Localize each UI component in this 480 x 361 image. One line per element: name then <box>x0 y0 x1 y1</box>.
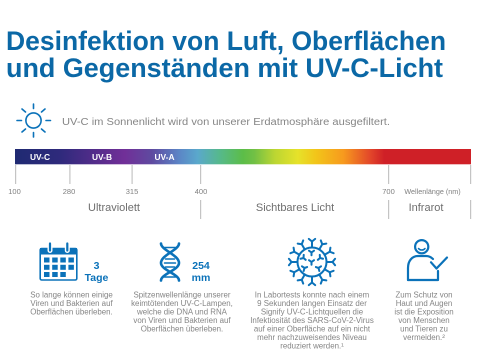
stat: 3 Tage: Tage <box>85 272 109 284</box>
spectrum bar: UV-B <box>92 152 112 162</box>
spectrum bar: UV-C <box>30 152 50 162</box>
wavelength scale <box>8 165 471 219</box>
text: virus description: Signify UV-C-Lichtquellen die <box>261 308 364 316</box>
stat: 3 Tage: 3 <box>94 260 100 272</box>
text: protection description: ist die Exposition <box>394 308 454 316</box>
wavelength scale: Wellenlänge (nm) <box>404 187 461 196</box>
text: 3 days description: So lange können einige <box>30 290 113 300</box>
title <box>6 26 446 83</box>
stat: 254 mm: mm <box>192 272 210 284</box>
text: protection description: Zum Schutz von <box>395 290 453 300</box>
stat: 254 mm: 254 <box>192 260 210 272</box>
text: virus description: mehr nachzuweisendes Niveau <box>257 333 367 342</box>
text: virus description: In Labortests konnte nach einem <box>255 290 370 300</box>
text: 254 description: Oberflächen überleben. <box>141 324 223 334</box>
text: 254 description: Spitzenwellenlänge unserer <box>134 290 231 300</box>
title: und Gegenständen mit UV-C-Licht <box>6 53 443 83</box>
text: protection description <box>394 290 454 342</box>
text: protection description: von Menschen <box>398 316 450 325</box>
text: protection description: Haut und Augen <box>396 299 452 308</box>
spectrum region labels: Ultraviolett <box>88 202 140 214</box>
text: 254 description: keimtötenden UV-C-Lampen, <box>131 299 233 308</box>
intro text: UV-C im Sonnenlicht wird von unserer Erdatmosphäre ausgefiltert. <box>62 117 390 128</box>
text: virus description: reduziert werden.¹ <box>280 342 344 350</box>
text: virus description: auf einer Oberfläche auf ein nicht <box>254 324 371 334</box>
icon: DNA helix <box>161 244 179 280</box>
text: virus description: 9 Sekunden langen Einsatz der <box>257 299 367 308</box>
stat: 254 mm <box>192 260 210 284</box>
spectrum region labels: Infrarot <box>409 202 443 214</box>
text: virus description <box>250 290 374 350</box>
spectrum region labels <box>88 202 443 214</box>
text: protection description: und Tieren zu <box>400 324 448 334</box>
wavelength scale: 700 <box>382 187 395 196</box>
icon: person with check mark <box>408 240 447 280</box>
wavelength scale: 100 <box>8 187 21 196</box>
spectrum bar <box>15 149 471 164</box>
text: 3 days description: Oberflächen überleben. <box>30 308 113 316</box>
text: protection description: vermeiden.² <box>403 333 445 342</box>
text: 254 description: welche die DNA und RNA <box>136 308 228 316</box>
text: virus description: Infektiosität des SARS-CoV-2-Virus <box>250 316 374 325</box>
spectrum bar: UV-A <box>154 152 175 162</box>
wavelength scale: 280 <box>63 187 75 196</box>
panel: 254 nm <box>131 244 233 334</box>
text: 254 description <box>131 290 233 334</box>
title: Desinfektion von Luft, Oberflächen <box>6 26 446 56</box>
icon: calendar <box>40 244 77 280</box>
text: 3 days description: Viren und Bakterien auf <box>30 299 113 308</box>
icon: sun <box>17 104 50 137</box>
panel: 3 days <box>30 244 113 316</box>
wavelength scale: 315 <box>126 187 138 196</box>
stat: 3 Tage <box>85 260 109 284</box>
spectrum region labels: Sichtbares Licht <box>256 202 334 214</box>
panel: virus study <box>250 239 374 350</box>
panel: protection <box>394 240 454 342</box>
icon: virus <box>289 239 335 285</box>
text: 254 description: von Viren und Bakterien auf <box>133 316 231 325</box>
wavelength scale: 400 <box>195 187 207 196</box>
text: 3 days description <box>30 290 113 316</box>
